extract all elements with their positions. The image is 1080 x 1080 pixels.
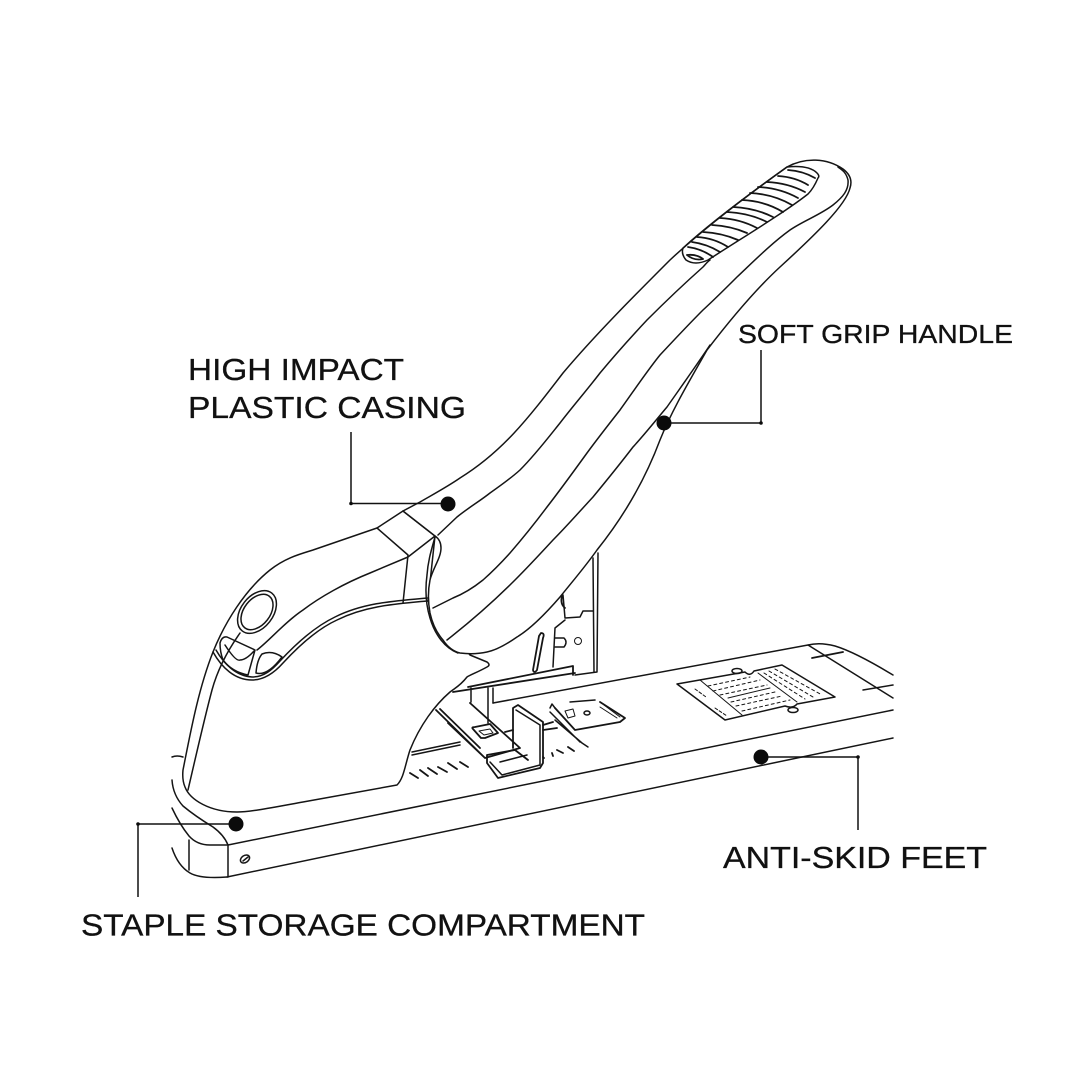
callout: soft grip handle: [656, 319, 1013, 430]
callout: staple storage compartment: STAPLE STORAGE COMPARTMENT: [81, 908, 645, 942]
label plate on base: [677, 665, 835, 720]
callout: staple storage compartment: [81, 816, 645, 942]
callout: high impact plastic casing: [188, 352, 466, 512]
soft grip handle: [403, 160, 851, 654]
high impact casing: [183, 511, 489, 812]
staple guide scale ticks: [410, 747, 574, 778]
callout: anti-skid feet: [723, 750, 987, 875]
callout: high impact plastic casing: HIGH IMPACT: [188, 352, 404, 387]
callout: soft grip handle: SOFT GRIP HANDLE: [738, 319, 1013, 349]
feed mechanism: [412, 553, 625, 778]
callout: high impact plastic casing: PLASTIC CASING: [188, 390, 466, 425]
stapler illustration: [172, 160, 893, 878]
grip texture: [682, 167, 819, 263]
base: [172, 644, 893, 878]
callout: anti-skid feet: ANTI-SKID FEET: [723, 840, 987, 875]
